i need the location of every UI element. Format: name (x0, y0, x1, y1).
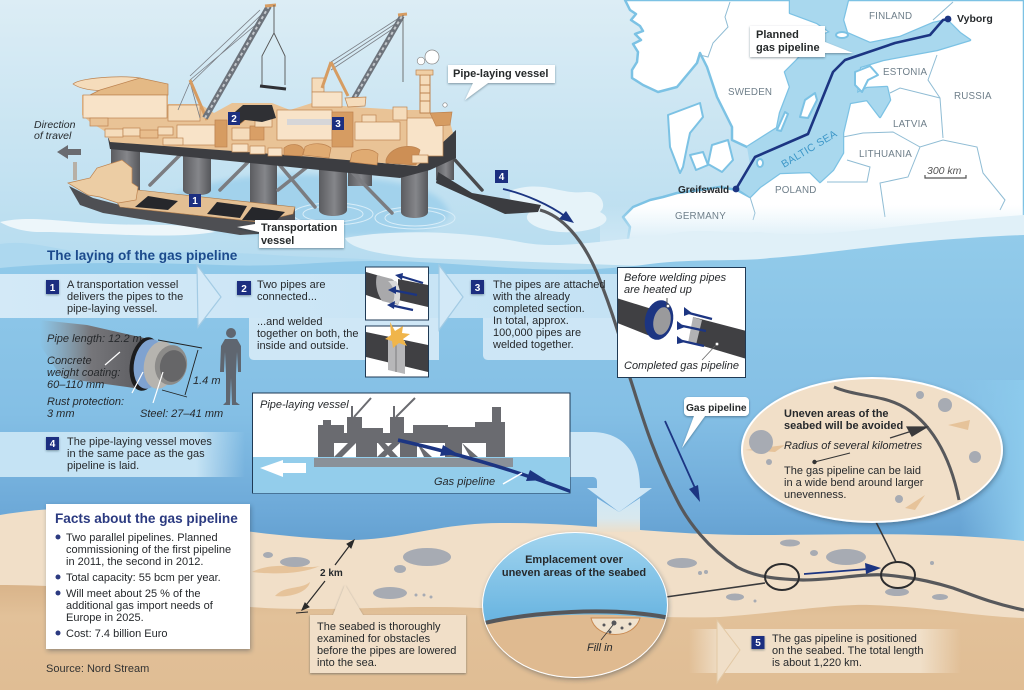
vessel: columns (111, 142, 454, 218)
arrow: direction of travel (57, 145, 81, 159)
vessel: stinger ramp (436, 172, 541, 214)
vessel: crane one (178, 5, 286, 120)
pipe: dimension lines (158, 340, 202, 397)
inset travel arrow (260, 460, 306, 477)
inset: pipes connected (366, 267, 428, 320)
step 5 band body (689, 629, 961, 673)
pipe: labels: Steel: 27–41 mm (140, 408, 223, 420)
facts box (46, 504, 250, 649)
map: country labels: SWEDEN (728, 87, 772, 98)
pipe: labels: Pipe length: 12.2 m (47, 333, 142, 345)
step 2 text: ...and welded (257, 316, 322, 328)
2 km dimension arrow: 2 km (320, 568, 343, 579)
facts box: Cost: 7.4 billion Euro (66, 628, 168, 640)
callout: transportation vessel: vessel (261, 235, 294, 247)
pipe: labels: 60–110 mm (47, 379, 104, 391)
step 3 text (471, 279, 606, 351)
step 3 text: 100,000 pipes are (493, 327, 581, 339)
heading: laying of the gas pipeline: The laying of the gas pipeline (47, 248, 238, 263)
map: eastern and southern land (623, 0, 1024, 250)
direction of travel label: Direction (34, 119, 76, 131)
map: scale bar: 300 km (927, 165, 962, 177)
pipe: labels: weight coating: (47, 367, 120, 379)
callout: transportation vessel: Transportation (261, 222, 337, 234)
chevron after step 1 (197, 265, 221, 327)
background: sky and upper sea (0, 0, 1024, 280)
callout: seabed examination: before the pipes are lowered (317, 645, 456, 657)
2 km dimension arrow (296, 540, 354, 613)
step 3 text: completed section. (493, 303, 585, 315)
step 4 text (46, 436, 212, 472)
inset vessel deck silhouette (318, 407, 505, 443)
callout: planned gas pipeline (750, 26, 853, 57)
map: Greifswald label: Greifswald (678, 185, 729, 196)
vessel: crane two (322, 14, 407, 107)
step 3 text: 3 (475, 283, 481, 294)
vessel: pipe stack on deck (228, 105, 276, 122)
pipe: leader lines (105, 352, 163, 403)
step 3 text: In total, approx. (493, 315, 569, 327)
inset: pipes welded (366, 322, 428, 377)
pipe: labels: Concrete (47, 355, 92, 367)
ship: mast (73, 162, 77, 180)
map: fade into sea (600, 205, 1024, 250)
step 3 text: welded together. (492, 339, 574, 351)
step 4 text: 4 (50, 439, 56, 450)
step 1 text: A transportation vessel (67, 279, 178, 291)
callout: planned gas pipeline: Planned (756, 29, 799, 41)
step 4 text: in the same pace as the gas (67, 448, 205, 460)
ship: bridge (68, 160, 138, 203)
step 2 text: Two pipes are (257, 279, 325, 291)
callout: pipe-laying vessel: Pipe-laying vessel (453, 68, 548, 80)
pipe: labels (47, 333, 223, 420)
facts box: in 2011, the second in 2012. (66, 556, 203, 568)
map: country labels: POLAND (775, 185, 816, 196)
step 2 text: 2 (241, 284, 247, 295)
map: country labels (675, 11, 992, 222)
inset: before welding pipes are heated: are heated up (624, 284, 692, 296)
callout: gas pipeline: Gas pipeline (686, 403, 747, 414)
icon: human silhouette for scale (220, 328, 241, 405)
ship: cargo pipes (135, 196, 285, 222)
step 2 text: together on both, the (257, 328, 359, 340)
callout: planned gas pipeline: gas pipeline (756, 42, 820, 54)
badge 4 at stinger: 4 (499, 172, 505, 183)
map of the Baltic Sea (600, 0, 1024, 250)
inset water (253, 457, 570, 493)
step 4 text: The pipe-laying vessel moves (67, 436, 212, 448)
fill-in mound (591, 618, 640, 634)
callout: seabed examination (310, 585, 466, 673)
step 1 text: delivers the pipes to the (67, 291, 183, 303)
callout: pipe-laying vessel (448, 65, 555, 100)
callout: seabed examination: The seabed is thoroughly (317, 621, 441, 633)
step 1 text (46, 279, 183, 315)
direction of travel label: of travel (34, 130, 72, 142)
step 4 text: pipeline is laid. (67, 460, 139, 472)
water surface waves (0, 174, 1024, 268)
detail circle: emplacement over uneven seabed: Emplacement over (525, 554, 624, 566)
ship: cargo deck (115, 190, 295, 222)
map: country labels: RUSSIA (954, 91, 992, 102)
badge 3 on vessel: 3 (335, 119, 341, 130)
map: country labels: GERMANY (675, 211, 726, 222)
pipe: labels: Rust protection: (47, 396, 124, 408)
inset cranes (352, 398, 415, 417)
step 2 text (237, 279, 359, 352)
inset: before welding pipes are heated (610, 268, 750, 378)
step 3 text: with the already (492, 291, 571, 303)
badge 4 at stinger (495, 170, 508, 183)
detail circle: emplacement over uneven seabed: Fill in (587, 642, 613, 654)
facts box: Two parallel pipelines. Planned (66, 532, 218, 544)
source: Source: Nord Stream (46, 663, 149, 675)
facts box: Europe in 2025. (66, 612, 144, 624)
facts box: commissioning of the first pipeline (66, 544, 231, 556)
step 3 text: The pipes are attached (493, 279, 606, 291)
map: Vyborg label: Vyborg (957, 13, 993, 25)
detail ellipse: uneven areas avoided: unevenness. (784, 489, 846, 501)
map: Baltic Sea water (737, 0, 970, 197)
step 5 text: is about 1,220 km. (772, 657, 862, 669)
step band 4 (0, 432, 245, 477)
inset: pipe-laying vessel silhouette: Gas pipeline (434, 476, 495, 488)
seabed: light sand (0, 509, 1024, 690)
main pipeline from vessel to seabed (540, 210, 1024, 610)
vessel: radar tower (416, 50, 447, 113)
map: Baltic Sea label: BALTIC SEA (779, 128, 839, 171)
vessel: deck underside (108, 130, 456, 178)
vessel: main structure (82, 95, 453, 166)
pipe: labels: 1.4 m (193, 375, 221, 387)
marker circle right (881, 562, 915, 588)
map: Denmark and islands (668, 32, 878, 173)
facts box: Will meet about 25 % of the (66, 588, 201, 600)
map: national borders (700, 2, 1005, 220)
facts box: Total capacity: 55 bcm per year. (66, 572, 221, 584)
step 3 lower panel (483, 318, 617, 360)
map: Greifswald dot (733, 186, 739, 192)
pipe: layered end (126, 335, 190, 393)
step 2 text: inside and outside. (257, 340, 349, 352)
step 5 text: The gas pipeline is positioned (772, 633, 917, 645)
detail circle: emplacement over uneven seabed: uneven areas of the seabed (502, 567, 646, 579)
arrow: shaft into seabed (597, 498, 640, 532)
detail ellipse: uneven areas avoided: seabed will be avoided (784, 420, 903, 432)
arrow: bend from vessel to seabed (570, 432, 652, 512)
inset pipeline (398, 440, 572, 492)
callout: transportation vessel (237, 220, 344, 248)
seabed rocks (252, 540, 948, 602)
inset: before welding pipes are heated: Before welding pipes (624, 272, 727, 284)
weld spark (385, 322, 410, 348)
arrow: bend indicator (890, 427, 927, 438)
map: pipeline route (736, 19, 948, 189)
step 2 lower panel (249, 318, 439, 360)
inset hull (314, 458, 513, 467)
map: country labels: ESTONIA (883, 67, 927, 78)
step 5 text: 5 (755, 638, 761, 649)
pipe: labels: 3 mm (47, 408, 74, 420)
direction of travel label (34, 119, 76, 142)
transportation ship (68, 160, 295, 235)
marker circle left (765, 564, 799, 590)
vessel: ripples (293, 203, 455, 229)
vessel: superstructure details (73, 77, 452, 165)
badge 1 on ship: 1 (192, 196, 198, 207)
arrow: pipeline descent (665, 421, 700, 502)
lower sea water (0, 235, 1024, 560)
step 5 text: on the seabed. The total length (772, 645, 923, 657)
lighter water at right edge (960, 380, 1024, 550)
inset vessel legs and braces (318, 443, 505, 457)
ship: hull (69, 186, 295, 235)
detail circle: emplacement over uneven seabed (480, 530, 670, 680)
callout: seabed examination: examined for obstacles (317, 633, 431, 645)
connector lines to detail circles (666, 522, 896, 597)
pipe cross-section diagram (40, 320, 223, 420)
badge 2 on vessel (228, 112, 240, 125)
detail ellipse: uneven areas avoided: The gas pipeline can be laid (784, 465, 921, 477)
badge 1 on ship (189, 194, 201, 207)
arrow: stinger pipe direction (503, 189, 574, 223)
detail ellipse: uneven areas avoided: Radius of several kilometres (784, 440, 923, 452)
steps band: continuous panel (0, 274, 617, 360)
inset labels: Pipe-laying vessel (260, 399, 349, 411)
map: Scandinavian land (625, 0, 830, 147)
facts box: additional gas import needs of (66, 600, 214, 612)
detail ellipse: uneven areas avoided: Uneven areas of the (784, 408, 889, 420)
steps band upper strip (0, 274, 617, 318)
map: country labels: LITHUANIA (859, 149, 912, 160)
step 1 text: 1 (50, 283, 56, 294)
inset: pipe-laying vessel silhouette (252, 393, 572, 493)
step 5 chevron (717, 620, 740, 683)
facts box: Facts about the gas pipeline (55, 511, 238, 526)
pipe-laying vessel (73, 5, 541, 229)
map: country labels: FINLAND (869, 11, 912, 22)
seabed: dark sand (0, 585, 1024, 690)
step 1 text: pipe-laying vessel. (67, 303, 158, 315)
badge 3 on vessel (332, 117, 344, 130)
callout: gas pipeline (682, 397, 749, 448)
badge 2 on vessel: 2 (231, 114, 237, 125)
detail ellipse: uneven areas avoided (741, 377, 1003, 523)
step 2 text: connected... (257, 291, 317, 303)
pipe: concrete body (40, 320, 153, 388)
step 5 text (752, 633, 923, 669)
radius indicator (814, 453, 850, 462)
callout: seabed examination: into the sea. (317, 657, 377, 669)
map: country labels: LATVIA (893, 119, 927, 130)
arrow: along seabed (804, 563, 881, 574)
detail ellipse: uneven areas avoided: in a wide bend around larger (784, 477, 924, 489)
inset: before welding pipes are heated: Completed gas pipeline (624, 360, 739, 372)
map: Vyborg dot (945, 16, 951, 22)
chevron after step 2 (439, 265, 463, 330)
vessel: braces (150, 155, 482, 213)
